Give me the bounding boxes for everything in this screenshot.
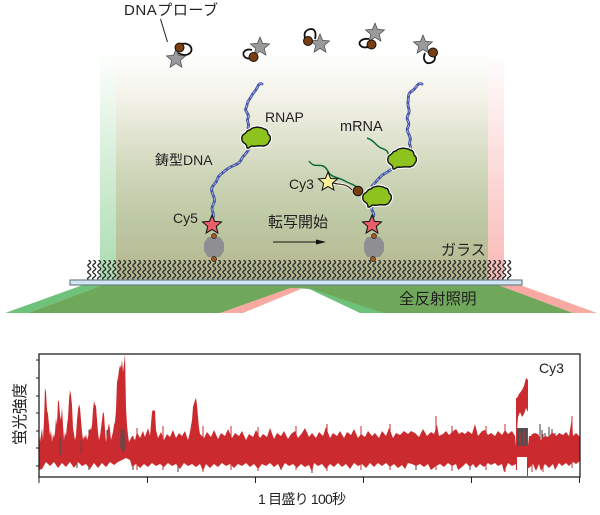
glass slide [70, 280, 522, 285]
label: total internal reflection illumination: 全反射照明 [399, 290, 477, 308]
right template DNA [372, 84, 422, 224]
icon: RNA polymerase (right upper) [388, 148, 416, 169]
icon: DNA probe 3 [304, 29, 330, 52]
label: glass: ガラス [441, 242, 486, 259]
label: RNAP: RNAP [265, 109, 304, 125]
x and y axis ticks [36, 360, 580, 483]
arrow: transcription proceeds [273, 240, 326, 244]
label: Cy3: Cy3 [289, 176, 314, 192]
icon: RNA polymerase (left) [242, 127, 270, 148]
y axis label: 蛍光強度 [11, 383, 29, 445]
chart label: Cy3: Cy3 [539, 360, 564, 376]
right immobilised complex [362, 215, 384, 262]
icon: RNA polymerase (right lower) [363, 186, 391, 207]
label: mRNA: mRNA [340, 119, 383, 135]
leader line for DNA probe [160, 19, 168, 42]
red trace burst at right [517, 378, 528, 430]
surface polymer layer [87, 260, 512, 280]
label: template DNA: 鋳型DNA [155, 152, 213, 168]
gray core blended over red [59, 428, 126, 455]
gray trace spikes [77, 424, 555, 473]
icon: DNA probe 5 [414, 35, 438, 63]
icon: Cy3 yellow star [318, 172, 338, 190]
left template DNA [212, 84, 262, 218]
mRNA strand (upper) [367, 138, 389, 157]
gray block under red burst [517, 428, 528, 452]
label: DNA probe: DNAプローブ [124, 1, 218, 19]
mRNA strand (lower) [309, 161, 358, 188]
icon: DNA probe 2 [243, 37, 270, 62]
bound probe linker dark [333, 183, 352, 190]
chart frame [39, 354, 580, 477]
fluorescence trace chart [11, 354, 580, 507]
total internal reflection light beams [5, 285, 597, 313]
left immobilised complex [202, 215, 224, 262]
red noise spikes [137, 398, 572, 476]
icon: bound brown quencher [353, 186, 363, 196]
icon: DNA probe 1 [166, 43, 192, 67]
icon: DNA probe 4 [359, 23, 384, 49]
red trace [39, 354, 580, 472]
bound probe linker [333, 183, 352, 190]
label: Cy5: Cy5 [173, 210, 198, 226]
label: transcription start: 転写開始 [268, 214, 328, 231]
panel: evanescent field background [100, 50, 504, 280]
x axis label: 1 目盛り 100秒 [258, 491, 346, 507]
